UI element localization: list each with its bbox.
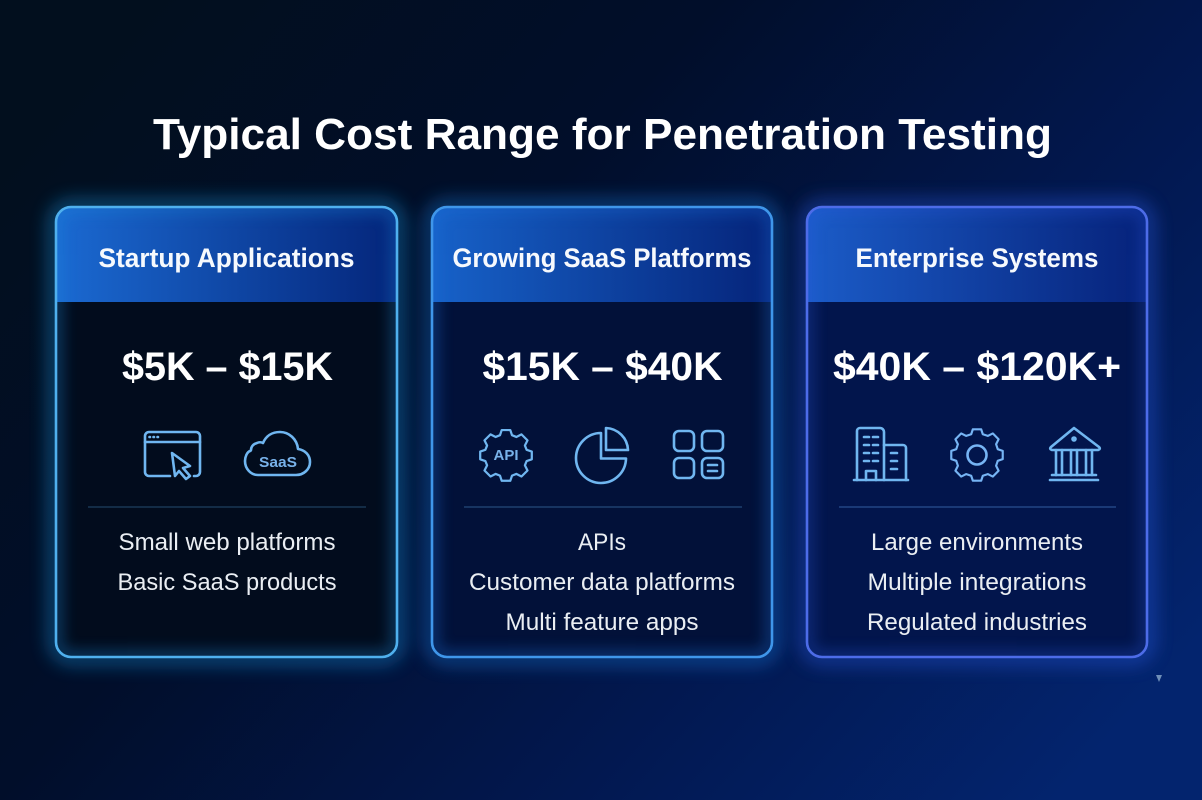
title: Typical Cost Range for Penetration Testing bbox=[153, 110, 1052, 159]
feature list: enterprise bbox=[867, 529, 1087, 636]
feature list: enterprise: Multiple integrations bbox=[868, 569, 1086, 596]
feature list: startup bbox=[118, 529, 336, 596]
feature list: growing saas bbox=[469, 529, 735, 636]
feature list: growing saas: APIs bbox=[578, 529, 626, 556]
feature list: growing saas: Multi feature apps bbox=[506, 609, 698, 636]
feature list: startup: Small web platforms bbox=[118, 529, 336, 556]
icon: office buildings bbox=[854, 428, 908, 480]
divider bbox=[464, 506, 742, 508]
icon: institution bbox=[1050, 428, 1100, 480]
divider bbox=[839, 506, 1116, 508]
heading: enterprise systems: Enterprise Systems bbox=[856, 243, 1098, 273]
icon: api gear: API bbox=[494, 447, 518, 464]
panel: growing saas platforms bbox=[431, 206, 773, 658]
divider bbox=[88, 506, 366, 508]
panel: startup applications bbox=[55, 206, 398, 658]
icon: saas cloud bbox=[245, 432, 310, 475]
icon: saas cloud: SaaS bbox=[259, 454, 297, 471]
feature list: enterprise: Large environments bbox=[871, 529, 1083, 556]
price: growing saas: $15K – $40K bbox=[482, 345, 723, 389]
icon: app grid bbox=[674, 431, 723, 478]
price: enterprise: $40K – $120K+ bbox=[833, 345, 1121, 389]
feature list: startup: Basic SaaS products bbox=[118, 569, 336, 596]
icon: gear bbox=[951, 429, 1003, 481]
feature list: growing saas: Customer data platforms bbox=[469, 569, 735, 596]
heading: startup applications: Startup Applications bbox=[98, 243, 354, 273]
price: startup: $5K – $15K bbox=[122, 345, 333, 389]
icon: browser with cursor bbox=[145, 432, 200, 479]
icon: pie chart bbox=[576, 428, 628, 483]
panel: enterprise systems bbox=[806, 206, 1148, 658]
icon: small arrow marker bbox=[1156, 675, 1162, 682]
heading: growing saas: Growing SaaS Platforms bbox=[452, 243, 752, 273]
icon: api gear bbox=[480, 430, 532, 481]
feature list: enterprise: Regulated industries bbox=[867, 609, 1087, 636]
